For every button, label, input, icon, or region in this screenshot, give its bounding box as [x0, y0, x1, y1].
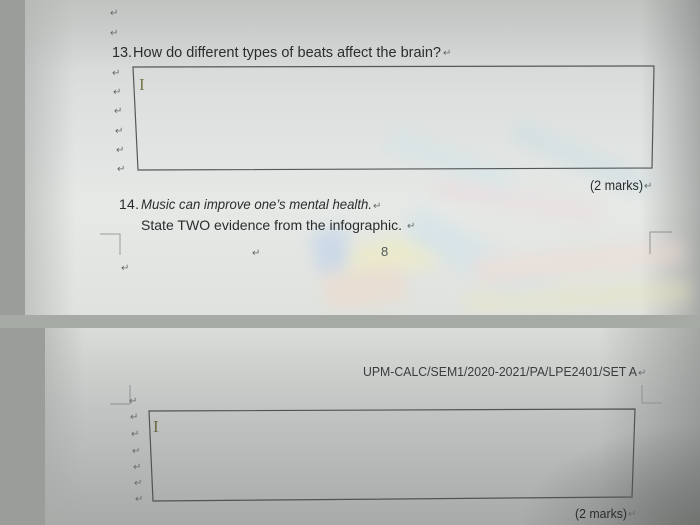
- left top margin paragraph marks: ↵: [110, 28, 118, 39]
- question 14 text: [119, 196, 415, 233]
- heading: question 13: ↵: [443, 48, 451, 59]
- panel: moire iridescence: [310, 120, 690, 312]
- crop mark: upper right: [650, 232, 672, 254]
- paragraph marks below question 14: ↵: [121, 263, 129, 274]
- margin paragraph marks: question 13: ↵: [117, 164, 125, 175]
- divider: gap between pages: [0, 315, 700, 328]
- question 14 text: ↵: [373, 201, 381, 212]
- margin paragraph marks: question 14: ↵: [131, 429, 139, 440]
- margin paragraph marks: question 14: ↵: [129, 396, 137, 407]
- margin paragraph marks: question 13: ↵: [116, 145, 124, 156]
- margin paragraph marks: question 14: [129, 396, 143, 505]
- page number: 8: [381, 244, 388, 259]
- document code header: UPM-CALC/SEM1/2020-2021/PA/LPE2401/SET A: [363, 365, 638, 379]
- answer box: question 13: [133, 66, 654, 170]
- answer box: question 14: [149, 409, 635, 501]
- heading: question 13: How do different types of beats affect the brain?: [133, 45, 441, 61]
- margin paragraph marks: question 13: ↵: [115, 126, 123, 137]
- marks label: question 13: (2 marks): [590, 178, 643, 193]
- margin paragraph marks: question 14: ↵: [135, 494, 143, 505]
- margin paragraph marks: question 14: ↵: [134, 478, 142, 489]
- question 14 text: 14.: [119, 196, 139, 212]
- margin paragraph marks: question 14: ↵: [133, 462, 141, 473]
- marks label: question 14: (2 marks): [575, 507, 627, 521]
- marks label: question 14: ↵: [628, 509, 636, 520]
- panel: upper exam page: [25, 0, 700, 316]
- margin paragraph marks: question 13: ↵: [112, 68, 120, 79]
- question 14 text: State TWO evidence from the infographic.: [141, 217, 402, 233]
- question 14 text: ↵: [407, 221, 415, 232]
- left top margin paragraph marks: [110, 8, 118, 39]
- icon: text cursor: I: [153, 417, 159, 436]
- heading: question 13: 13.: [112, 45, 132, 61]
- crop mark: upper left: [100, 234, 120, 255]
- crop mark: lower right: [642, 385, 662, 403]
- margin paragraph marks: question 14: ↵: [132, 446, 140, 457]
- marks label: question 13: ↵: [644, 181, 652, 192]
- margin paragraph marks: question 13: [112, 68, 125, 175]
- document code header: ↵: [638, 368, 646, 379]
- paragraph marks below question 14: ↵: [252, 248, 260, 259]
- paragraph marks below question 14: [121, 248, 260, 274]
- margin paragraph marks: question 14: ↵: [130, 412, 138, 423]
- margin paragraph marks: question 13: ↵: [114, 106, 122, 117]
- icon: text cursor: I: [139, 75, 145, 94]
- panel: lower exam page: [45, 328, 700, 525]
- crop mark: lower left: [110, 385, 130, 404]
- left top margin paragraph marks: ↵: [110, 8, 118, 19]
- margin paragraph marks: question 13: ↵: [113, 87, 121, 98]
- question 14 text: Music can improve one’s mental health.: [141, 196, 372, 212]
